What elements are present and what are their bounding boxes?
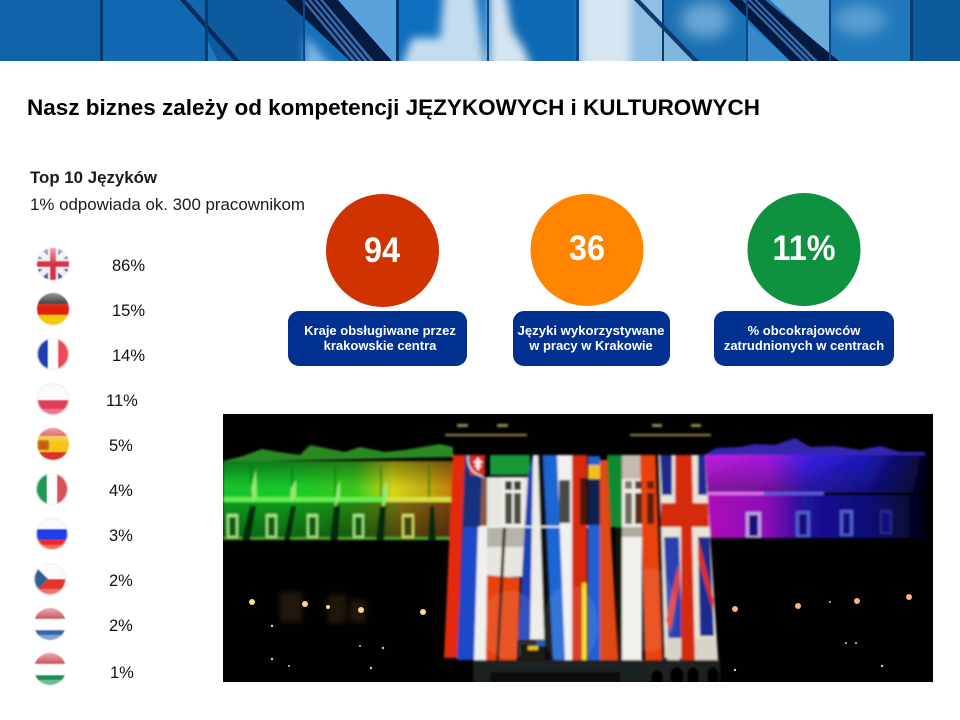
- text: Polish 11%: 11%: [106, 392, 138, 410]
- text: Spanish 5%: 5%: [109, 437, 133, 455]
- dim arcades: [280, 592, 366, 623]
- stat: 36 languages: [513, 194, 670, 366]
- text: Italian 4%: 4%: [109, 482, 133, 500]
- purple building facade: [704, 438, 930, 538]
- icon: Hungarian flag: [34, 653, 66, 685]
- stat: 11% foreigners: [714, 193, 894, 366]
- header banner: glass facade: [0, 0, 960, 61]
- label box: countries served: Kraje obsługiwane przez: [304, 323, 456, 338]
- circle: red 94: 94: [364, 231, 400, 270]
- text: English 86%: 86%: [112, 257, 145, 275]
- tower details above the flags: [445, 424, 711, 436]
- icon: UK flag: [37, 248, 69, 280]
- text: French 14%: 14%: [112, 347, 145, 365]
- icon: Dutch flag: [34, 608, 66, 640]
- flags projection: [444, 455, 718, 660]
- label box: languages used: w pracy w Krakowie: [528, 338, 653, 353]
- icon: Czech flag: [33, 563, 66, 595]
- icon: French flag: [37, 338, 69, 370]
- text: German 15%: 15%: [112, 302, 145, 320]
- green building facade: [223, 444, 453, 540]
- label box: foreign employees: [714, 311, 894, 366]
- circle: red 94: [326, 194, 439, 307]
- icon: Italian flag: [36, 473, 68, 505]
- label box: countries served: krakowskie centra: [324, 338, 437, 353]
- circle: green 11%: 11%: [772, 229, 836, 268]
- label box: languages used: Języki wykorzystywane: [518, 323, 664, 338]
- circle: green 11%: [748, 193, 860, 306]
- text: Russian 3%: 3%: [109, 527, 133, 545]
- subheading: top 10 languages: Top 10 Języków: [30, 169, 157, 187]
- title: Nasz biznes zależy od kompetencji JĘZYKOWYCH i KULTUROWYCH: [27, 95, 760, 120]
- icon: Polish flag: [37, 383, 69, 415]
- stage and crowd: [473, 641, 720, 686]
- circle: orange 36: 36: [569, 229, 605, 268]
- label box: foreign employees: zatrudnionych w centrach: [724, 338, 884, 353]
- icon: Spanish flag: [37, 428, 69, 460]
- arches glow: [480, 568, 676, 665]
- photo: Cloth Hall illuminated with flags at night: [223, 414, 933, 686]
- icon: Russian flag: [36, 518, 68, 550]
- plaza lights: [249, 594, 912, 671]
- stat: 94 countries: [288, 194, 467, 366]
- text: Czech 2%: 2%: [109, 572, 133, 590]
- label box: countries served: [288, 311, 467, 366]
- label box: languages used: [513, 311, 670, 366]
- circle: orange 36: [530, 194, 644, 306]
- text: Dutch 2%: 2%: [109, 617, 133, 635]
- text: Hungarian 1%: 1%: [110, 664, 134, 682]
- language list with flags: [33, 248, 145, 685]
- icon: German flag: [37, 293, 69, 325]
- note: one percent equals about 300 employees: 1% odpowiada ok. 300 pracownikom: [30, 196, 305, 214]
- label box: foreign employees: % obcokrajowców: [748, 323, 861, 338]
